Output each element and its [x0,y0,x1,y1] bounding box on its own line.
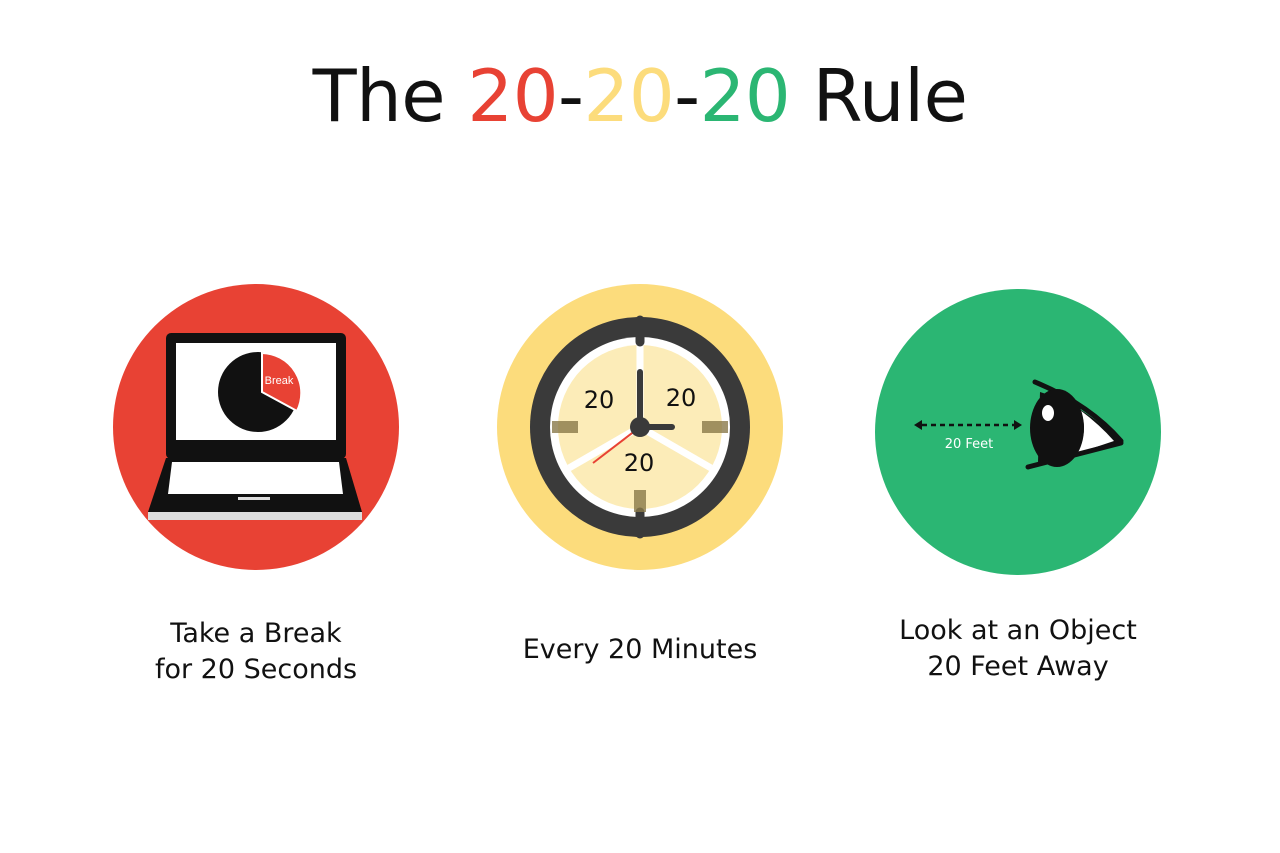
caption: break [155,618,357,685]
caption: look away: Look at an Object [899,615,1137,646]
icon: clock: 20 [624,449,654,477]
icon: clock: 20 [584,386,614,414]
caption: look away: 20 Feet Away [927,651,1109,682]
icon: laptop: Break [265,375,294,387]
caption: every 20 minutes: Every 20 Minutes [523,634,757,665]
caption: break: Take a Break [170,618,342,649]
icon: eye: 20 Feet [945,437,993,452]
icon: clock: 20 [666,384,696,412]
icon: clock [497,284,783,570]
title: The 20-20-20 Rule [313,54,967,138]
icon: eye [875,289,1161,575]
caption: look away [899,615,1137,682]
icon: laptop [113,284,399,570]
caption: break: for 20 Seconds [155,654,357,685]
